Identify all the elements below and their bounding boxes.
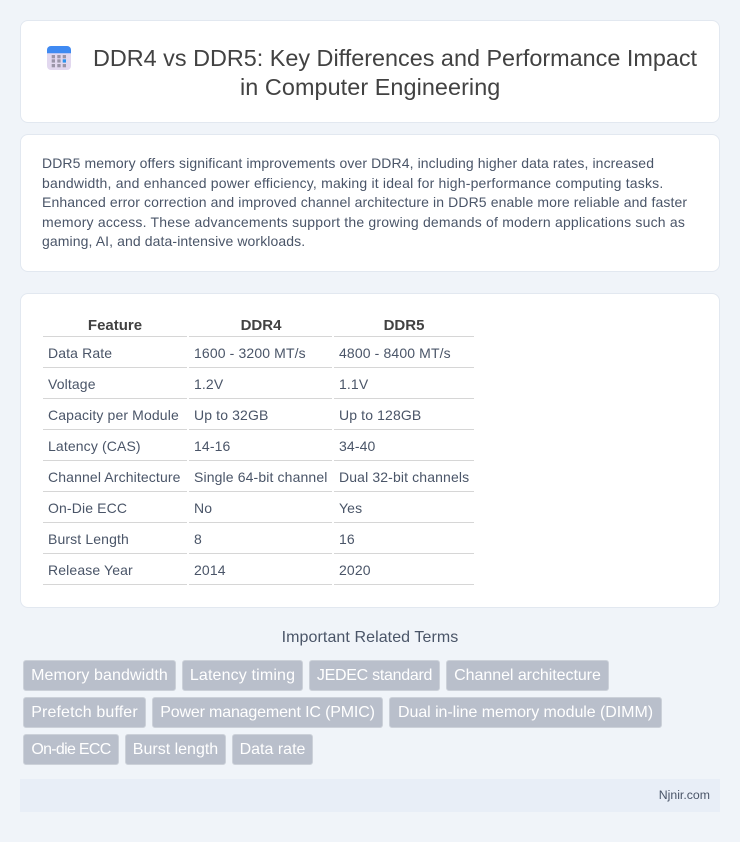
table: DDR4 vs DDR5: Channel Architecture [48, 469, 181, 485]
text: summary paragraph: DDR5 memory offers significant improvements over DDR4, including higher data rates, increased [42, 155, 654, 171]
related term tags: Power management IC (PMIC) [160, 704, 375, 721]
related term tags: Latency timing [190, 667, 295, 684]
table: DDR4 vs DDR5: 1600 - 3200 MT/s [194, 345, 306, 361]
table: DDR4 vs DDR5: 34-40 [339, 438, 375, 454]
table: DDR4 vs DDR5: 2014 [194, 562, 226, 578]
table: DDR4 vs DDR5: Up to 128GB [339, 407, 421, 423]
table: DDR4 vs DDR5: Data Rate [48, 345, 112, 361]
table: DDR4 vs DDR5: Yes [339, 500, 362, 516]
related term tags [23, 660, 662, 765]
table: DDR4 vs DDR5: 1.2V [194, 376, 223, 392]
table: DDR4 vs DDR5: Dual 32-bit channels [339, 469, 469, 485]
table header: Feature [88, 317, 142, 334]
table: DDR4 vs DDR5: Up to 32GB [194, 407, 268, 423]
related term tags: Memory bandwidth [31, 667, 168, 684]
related term tags: JEDEC standard [317, 667, 432, 684]
title: DDR4 vs DDR5: Key Differences and Performance Impact [93, 45, 697, 71]
table: DDR4 vs DDR5: Burst Length [48, 531, 129, 547]
related term tags: Burst length [133, 741, 218, 758]
icon: calendar [47, 46, 71, 70]
table: DDR4 vs DDR5: Voltage [48, 376, 96, 392]
text: summary paragraph: memory access. These advancements support the growing demands of modern applications such as [42, 214, 685, 230]
related term tags: On-die ECC [31, 741, 111, 758]
title: in Computer Engineering [240, 74, 500, 100]
table: DDR4 vs DDR5: Capacity per Module [48, 407, 179, 423]
footer credit: Njnir.com [659, 788, 710, 802]
title [93, 45, 697, 100]
related term tags: Channel architecture [454, 667, 601, 684]
related term tags: Prefetch buffer [31, 704, 138, 721]
table: DDR4 vs DDR5: 14-16 [194, 438, 230, 454]
table: DDR4 vs DDR5: Single 64-bit channel [194, 469, 328, 485]
table: DDR4 vs DDR5: 16 [339, 531, 355, 547]
heading: related terms: Important Related Terms [282, 629, 458, 646]
table: DDR4 vs DDR5: Latency (CAS) [48, 438, 141, 454]
panel: comparison table [20, 293, 720, 608]
table header: DDR4 [241, 317, 281, 334]
table: DDR4 vs DDR5 [43, 317, 474, 585]
text: summary paragraph [42, 155, 687, 249]
table: DDR4 vs DDR5: 8 [194, 531, 202, 547]
panel: summary [20, 134, 720, 272]
table: DDR4 vs DDR5: No [194, 500, 212, 516]
text: summary paragraph: Enhanced error correction and improved channel architecture in DDR5 enable more reliable and faster [42, 194, 687, 210]
related term tags: Data rate [240, 741, 305, 758]
related term tags: Dual in-line memory module (DIMM) [398, 704, 653, 721]
text: summary paragraph: gaming, AI, and data-intensive workloads. [42, 233, 305, 249]
table header: DDR5 [384, 317, 424, 334]
table: DDR4 vs DDR5: 4800 - 8400 MT/s [339, 345, 451, 361]
table: DDR4 vs DDR5: On-Die ECC [48, 500, 127, 516]
panel: title card [20, 20, 720, 123]
text: summary paragraph: bandwidth, and enhanced power efficiency, making it ideal for high-performance computing tasks. [42, 175, 663, 191]
table header [88, 317, 424, 334]
table: DDR4 vs DDR5: 2020 [339, 562, 371, 578]
table: DDR4 vs DDR5: Release Year [48, 562, 133, 578]
footer [20, 779, 720, 812]
table: DDR4 vs DDR5: 1.1V [339, 376, 368, 392]
